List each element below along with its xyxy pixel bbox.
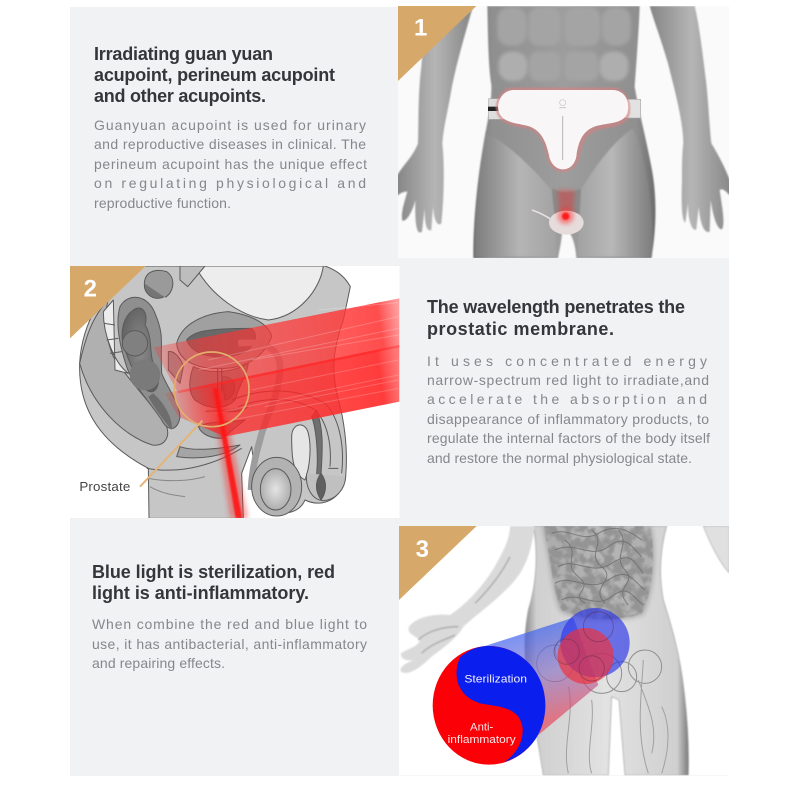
panel: step 2 image, pelvic cross section with red beams bbox=[70, 266, 400, 518]
body text: step 2: regulate the internal factors of the body itself bbox=[427, 430, 710, 446]
heading: step 3: light is anti-inflammatory. bbox=[92, 583, 309, 603]
badge: number 2: 2 bbox=[84, 276, 97, 303]
body text: step 3 bbox=[92, 616, 367, 671]
belt strap bbox=[488, 99, 641, 119]
body text: step 1: reproductive function. bbox=[94, 195, 231, 211]
intestines bbox=[542, 526, 655, 621]
anti-inflammatory label: inflammatory bbox=[448, 734, 516, 746]
heading: step 2: prostatic membrane. bbox=[427, 319, 614, 339]
body text: step 2: accelerate the absorption and bbox=[427, 391, 707, 407]
body text: step 1: Guanyuan acupoint is used for urinary bbox=[94, 117, 366, 133]
body text: step 2: narrow-spectrum red light to irradiate,and bbox=[427, 372, 709, 388]
blue light zone bbox=[560, 608, 630, 677]
heading: step 2 bbox=[427, 297, 685, 339]
badge: number 3 bbox=[399, 526, 477, 600]
page background panel bbox=[70, 7, 729, 776]
prostate callout line bbox=[140, 421, 202, 487]
badge: number 3: 3 bbox=[416, 536, 429, 563]
red glow around device bbox=[496, 87, 630, 172]
panel: step 3 text bbox=[92, 562, 367, 671]
body text: step 2 bbox=[427, 353, 710, 466]
heading: step 3 bbox=[92, 562, 335, 603]
translucent human body bbox=[401, 526, 729, 775]
projection cone bbox=[485, 618, 598, 735]
body text: step 3: use, it has antibacterial, anti-inflammatory bbox=[92, 636, 367, 652]
prostate label: Prostate bbox=[79, 479, 130, 494]
body text: step 3: and repairing effects. bbox=[92, 655, 225, 671]
body text: step 2: It uses concentrated energy bbox=[427, 353, 707, 369]
body text: step 3: When combine the red and blue light to bbox=[92, 616, 367, 632]
heading: step 1 bbox=[94, 44, 335, 106]
panel: step 1 image, body with wearable device bbox=[396, 6, 733, 258]
heading: step 1: acupoint, perineum acupoint bbox=[94, 65, 335, 85]
body text: step 2: and restore the normal physiological state. bbox=[427, 450, 692, 466]
red and blue yin-yang diagram bbox=[433, 646, 545, 765]
panel: step 1 text bbox=[94, 44, 367, 211]
abdominal muscles bbox=[497, 7, 631, 81]
thighs bbox=[476, 141, 553, 257]
body text: step 1: and reproductive diseases in clinical. The bbox=[94, 136, 366, 152]
lower red beam bbox=[165, 345, 399, 437]
badge: number 1 bbox=[398, 6, 476, 81]
badge: number 2 bbox=[70, 266, 146, 338]
left arm and hand bbox=[396, 6, 473, 233]
torso and legs bbox=[473, 6, 655, 258]
right arm and hand bbox=[650, 6, 733, 232]
body text: step 1: on regulating physiological and bbox=[94, 175, 366, 191]
wearable device bbox=[498, 90, 628, 169]
heading: step 3: Blue light is sterilization, red bbox=[92, 562, 335, 582]
prostate highlight circle bbox=[174, 352, 249, 427]
heading: step 2: The wavelength penetrates the bbox=[427, 297, 685, 317]
heading: step 1: and other acupoints. bbox=[94, 86, 266, 106]
body text: step 1: perineum acupoint has the unique effect bbox=[94, 156, 367, 172]
upper red beam bbox=[153, 298, 399, 393]
anti-inflammatory label: Anti- bbox=[470, 722, 494, 734]
red light zone bbox=[558, 628, 614, 684]
heading: step 1: Irradiating guan yuan bbox=[94, 44, 273, 64]
badge: number 1: 1 bbox=[414, 15, 427, 42]
body text: step 2: disappearance of inflammatory products, to bbox=[427, 411, 709, 427]
sterilization label: Sterilization bbox=[464, 674, 527, 686]
lower red light on perineum bbox=[532, 190, 584, 235]
pelvic anatomy illustration bbox=[80, 266, 350, 518]
pelvis and leg vessels bbox=[537, 637, 668, 773]
panel: step 2 text bbox=[427, 297, 710, 466]
vertical red beam bbox=[210, 385, 248, 518]
panel: step 3 image, translucent anatomy with light diagram bbox=[399, 526, 729, 776]
body text: step 1 bbox=[94, 117, 367, 211]
